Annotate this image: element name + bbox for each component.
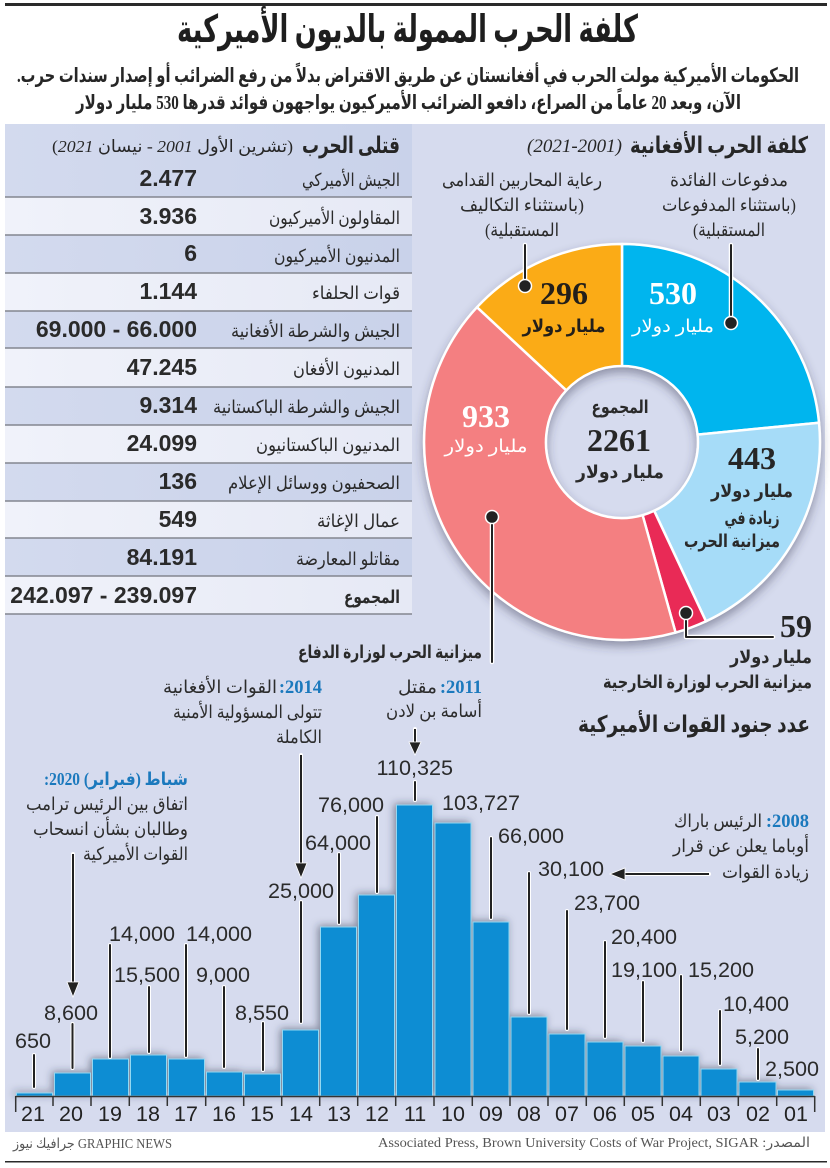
year labels: 14 (289, 1102, 313, 1126)
annotation: 2011: 2011: (440, 678, 482, 698)
donut total (575, 397, 664, 483)
label: interest payments: (باستثناء المدفوعات (662, 195, 796, 216)
value labels: 14,000 (186, 921, 252, 946)
row values: 242.097 - 239.097 (10, 582, 197, 608)
year labels (21, 1102, 808, 1126)
value labels: 8,600 (44, 1000, 98, 1025)
donut chart (424, 244, 820, 640)
year labels: 13 (327, 1102, 351, 1126)
panel: cost of the war donut (298, 130, 820, 693)
row labels: مقاتلو المعارضة (296, 549, 400, 570)
row values: 24.099 (127, 430, 197, 456)
label: veterans care (442, 170, 602, 241)
bottom rule (5, 1161, 827, 1162)
top rule (5, 3, 827, 6)
value labels: 5,200 (735, 1024, 789, 1049)
row labels: المجموع (344, 587, 400, 608)
value labels: 19,100 (611, 957, 677, 982)
value labels: 103,727 (442, 790, 520, 815)
row labels: المقاولون الأميركيون (269, 207, 400, 229)
donut total: المجموع (592, 397, 648, 418)
label: veterans care: (باستثناء التكاليف (460, 195, 584, 216)
label: state department: 59 (780, 608, 812, 644)
label: state department: مليار دولار (729, 647, 812, 668)
donut values: 296 (540, 275, 588, 311)
year labels: 05 (631, 1102, 655, 1126)
row labels: المدنيون الأميركيون (274, 245, 400, 267)
intro text: الآن، وبعد 20 عاماً من الصراع، دافعو الضرائب الأميركيون يواجهون فوائد قدرها 530 مليار دولار (75, 88, 741, 114)
donut values: ميزانية الحرب (684, 531, 780, 552)
annotation: 2008: زيادة القوات (722, 862, 809, 883)
donut values: زيادة في (724, 508, 780, 529)
annotation: 2008: الرئيس باراك (674, 811, 762, 832)
row labels: الصحفيون ووسائل الإعلام (228, 473, 400, 494)
axis with ticks (16, 1096, 815, 1112)
value labels: 23,700 (574, 890, 640, 915)
row labels: المدنيون الأفغان (293, 358, 400, 380)
year labels: 15 (250, 1102, 274, 1126)
year labels: 08 (517, 1102, 541, 1126)
row labels: عمال الإغاثة (317, 511, 400, 531)
row values: 2.477 (139, 165, 197, 191)
value labels: 15,500 (114, 962, 180, 987)
year labels: 16 (212, 1102, 236, 1126)
year labels: 09 (479, 1102, 503, 1126)
value labels: 66,000 (498, 823, 564, 848)
row values (10, 165, 197, 608)
year labels: 19 (98, 1102, 122, 1126)
table rows background (5, 124, 412, 614)
row values: 69.000 - 66.000 (36, 316, 197, 342)
heading: war deaths (52, 133, 400, 159)
donut total: مليار دولار (575, 462, 664, 483)
annotation: February 2020 (26, 769, 188, 865)
row labels: قوات الحلفاء (312, 283, 400, 304)
value labels: 10,400 (723, 991, 789, 1016)
year labels: 03 (707, 1102, 731, 1126)
panel: war deaths table (5, 124, 412, 614)
label: interest payments: مدفوعات الفائدة (670, 170, 788, 191)
value labels: 650 (15, 1028, 51, 1053)
year labels: 06 (593, 1102, 617, 1126)
arrow: 2020 (67, 854, 79, 997)
donut values: 933 (462, 398, 510, 434)
value labels: 110,325 (377, 755, 453, 780)
heading: war deaths: (تشرين الأول 2001 - نيسان 2021) (52, 136, 293, 156)
annotation: 2014: الكاملة (276, 727, 322, 747)
value labels (15, 755, 819, 1081)
annotation: 2011: مقتل (398, 677, 437, 697)
row labels: الجيش الأميركي (302, 169, 400, 191)
annotation: 2008: 2008: (766, 812, 809, 832)
value labels: 20,400 (611, 924, 677, 949)
heading: cost of the Afghan war: (2021-2001) (527, 136, 622, 157)
label: veterans care: رعاية المحاربين القدامى (442, 170, 602, 191)
value labels: 30,100 (538, 856, 604, 881)
donut total: 2261 (587, 422, 651, 458)
year labels: 18 (136, 1102, 160, 1126)
annotation: 2008: أوباما يعلن عن قرار (672, 834, 809, 857)
bar chart: troop numbers (15, 755, 819, 1126)
annotation: February 2020: القوات الأميركية (83, 843, 188, 865)
value labels: 15,200 (688, 957, 754, 982)
row values: 3.936 (139, 203, 197, 229)
annotation: February 2020: شباط (فبراير) 2020: (44, 769, 188, 790)
row labels: المدنيون الباكستانيون (256, 435, 400, 456)
label: veterans care: المستقبلية) (485, 220, 559, 241)
annotation: February 2020: اتفاق بين الرئيس ترامب (26, 794, 188, 815)
year labels: 07 (555, 1102, 579, 1126)
row values: 1.144 (139, 278, 197, 304)
leader lines and dots (486, 245, 773, 662)
donut values: 530 (649, 275, 697, 311)
value labels: 9,000 (196, 962, 250, 987)
value labels: 76,000 (318, 792, 384, 817)
row labels: الجيش والشرطة الأفغانية (231, 320, 400, 342)
annotation: 2011: أسامة بن لادن (386, 699, 482, 722)
annotation: 2008 (672, 811, 809, 883)
row labels: الجيش والشرطة الباكستانية (213, 397, 400, 418)
row values: 136 (159, 468, 197, 494)
heading: war deaths: قتلى الحرب (302, 133, 400, 159)
year labels: 10 (441, 1102, 465, 1126)
heading: cost of the Afghan war (527, 130, 808, 159)
annotation: 2011 (386, 677, 482, 722)
footer: credit: GRAPHIC NEWS جرافيك نيوز (12, 1136, 172, 1152)
intro text (17, 61, 799, 114)
label: state department (603, 608, 812, 693)
label: defense department: ميزانية الحرب لوزارة الدفاع (298, 642, 482, 663)
year labels: 17 (174, 1102, 198, 1126)
label: interest payments: المستقبلية) (693, 220, 765, 241)
value labels: 64,000 (305, 830, 371, 855)
year labels: 11 (404, 1102, 426, 1126)
bar leader lines (34, 782, 758, 1087)
year labels: 04 (669, 1102, 693, 1126)
donut values: مليار دولار (522, 316, 606, 337)
annotation: 2014: تتولى المسؤولية الأمنية (173, 701, 322, 723)
footer: source: المصدر: Associated Press, Brown University Costs of War Project, SIGAR (378, 1135, 810, 1151)
label: interest payments (662, 170, 796, 241)
row values: 84.191 (127, 544, 197, 570)
row labels (213, 169, 400, 608)
annotation: 2014: القوات الأفغانية (163, 676, 277, 698)
donut values: مليار دولار (631, 316, 714, 337)
year labels: 12 (365, 1102, 389, 1126)
bars (16, 805, 814, 1096)
arrow: 2011 (409, 729, 421, 755)
donut values (443, 275, 793, 552)
annotation: 2014 (163, 676, 322, 747)
donut values: 443 (728, 440, 776, 476)
value labels: 8,550 (235, 1000, 289, 1025)
row values: 6 (184, 240, 197, 266)
donut values: مليار دولار (710, 481, 793, 502)
annotation: 2014: 2014: (279, 678, 322, 698)
value labels: 2,500 (765, 1056, 819, 1081)
value labels: 25,000 (268, 878, 334, 903)
annotation: February 2020: وطالبان بشأن انسحاب (33, 816, 188, 840)
year labels: 20 (59, 1102, 83, 1126)
donut values: مليار دولار (443, 436, 528, 457)
arrow: 2014 (295, 755, 307, 878)
row values: 549 (159, 506, 197, 532)
arrow: 2008 (610, 868, 709, 880)
year labels: 02 (746, 1102, 770, 1126)
value labels: 14,000 (109, 921, 175, 946)
row values: 47.245 (127, 354, 197, 380)
year labels: 21 (21, 1102, 45, 1126)
year labels: 01 (784, 1102, 808, 1126)
row values: 9.314 (139, 392, 197, 418)
